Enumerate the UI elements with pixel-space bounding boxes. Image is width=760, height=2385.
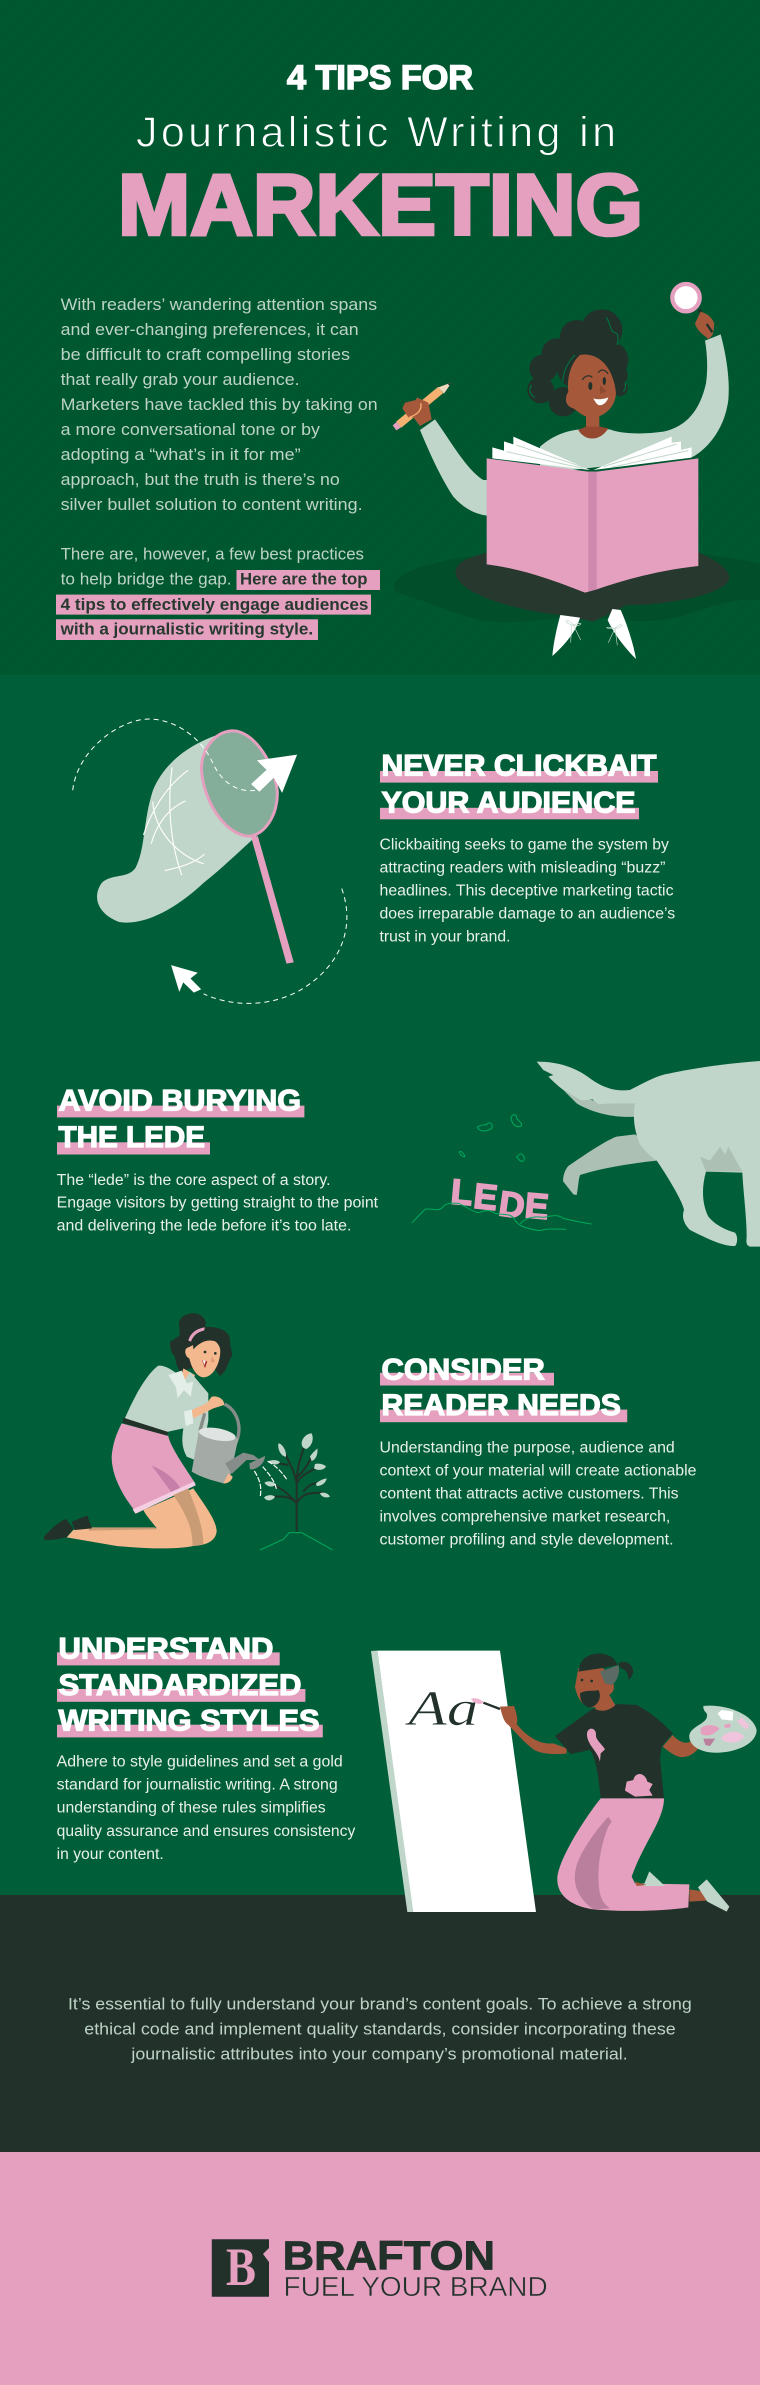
water drops: [254, 1461, 287, 1496]
dirt line and clods: [412, 1115, 592, 1231]
dog belly shading: [700, 1147, 742, 1172]
tip 1 heading: [380, 750, 658, 819]
intro paragraph one: a more conversational tone or by: [61, 421, 321, 439]
logo mark: [212, 2237, 269, 2297]
hair: [527, 309, 628, 416]
illustration: woman watering a plant: [43, 1313, 333, 1550]
tip 4 body: Adhere to style guidelines and set a gold: [57, 1754, 343, 1771]
shoes: [552, 609, 636, 659]
tip 1 heading: NEVER CLICKBAIT: [382, 750, 656, 783]
brush: [471, 1698, 500, 1709]
skirt: [455, 552, 729, 622]
canvas: Aa: [405, 1680, 478, 1736]
tip 2 heading: [57, 1084, 304, 1154]
watering can: [192, 1404, 265, 1483]
tip 3 body: context of your material will create actionable: [380, 1463, 696, 1480]
dashed path upper: [73, 719, 257, 791]
canvas: [371, 1651, 536, 1912]
belt: [123, 1418, 168, 1437]
arm and hand: [184, 1396, 224, 1426]
tip 3 heading: READER NEEDS: [382, 1389, 621, 1422]
hair back: [170, 1313, 232, 1376]
ground and plant: [260, 1433, 333, 1550]
tip 3 body: Understanding the purpose, audience and: [380, 1440, 675, 1457]
sweater: [420, 334, 729, 516]
closing text: journalistic attributes into your company’s promotional material.: [130, 2045, 628, 2063]
dog shaded limbs: [563, 1090, 657, 1195]
closing text: [68, 1995, 692, 2063]
tip 1 body: [380, 836, 676, 945]
neck: [578, 413, 608, 439]
face: [530, 317, 625, 417]
title line: 4 tips for: 4 TIPS FOR: [287, 59, 473, 97]
t-shirt: [555, 1704, 673, 1798]
pencil and hand: [393, 382, 452, 430]
tip 4 heading: STANDARDIZED: [58, 1669, 302, 1702]
buried lede word: LEDE: [449, 1172, 550, 1227]
intro paragraph one: [61, 296, 378, 514]
closing text: It’s essential to fully understand your brand’s content goals. To achieve a strong: [68, 1995, 692, 2013]
legs: [67, 1488, 217, 1548]
intro paragraph two: There are, however, a few best practices: [61, 546, 364, 564]
tip 4 body: understanding of these rules simplifies: [57, 1800, 326, 1816]
logo wordmark: BRAFTON: [283, 2232, 495, 2278]
tip 1 body: does irreparable damage to an audience’s: [380, 905, 676, 922]
tip 3 body: involves comprehensive market research,: [380, 1508, 670, 1526]
arms: [500, 1706, 698, 1757]
title line: marketing: MARKETING: [118, 158, 643, 254]
tip 2 body: and delivering the lede before it’s too late.: [57, 1218, 351, 1235]
intro paragraph one: approach, but the truth is there’s no: [61, 471, 340, 489]
ground shadow: [393, 553, 760, 622]
tip 3 heading: CONSIDER: [382, 1354, 545, 1386]
shirt: [123, 1366, 208, 1460]
dog body and tail: [537, 1061, 760, 1247]
closing text: ethical code and implement quality standards, consider incorporating these: [84, 2020, 676, 2038]
tip 3 body: content that attracts active customers. This: [380, 1486, 679, 1502]
head: [575, 1654, 633, 1708]
intro paragraph one: that really grab your audience.: [61, 371, 300, 389]
illustration: woman reading a pink book: [393, 284, 760, 659]
dashed path lower: [204, 889, 347, 1003]
net handle: [251, 836, 294, 964]
tip 2 heading: THE LEDE: [58, 1121, 205, 1154]
net hoop: [201, 731, 277, 836]
illustration: painter at canvas: [371, 1651, 757, 1912]
intro paragraph two: with a journalistic writing style.: [60, 620, 313, 638]
intro paragraph one: be difficult to craft compelling stories: [61, 346, 350, 364]
shorts: [112, 1423, 196, 1514]
intro paragraph two: to help bridge the gap.: [61, 571, 232, 589]
paint splats on shirt: [587, 1729, 653, 1797]
face: [185, 1327, 222, 1377]
intro text block: [56, 296, 380, 640]
intro paragraph one: Marketers have tackled this by taking on: [61, 396, 378, 414]
tip 3 body: customer profiling and style development.: [380, 1531, 674, 1548]
tip 3 heading: [380, 1354, 627, 1422]
illustration: butterfly net catching a cursor: [73, 719, 347, 1003]
tip 4 heading: [57, 1633, 323, 1738]
title: [118, 59, 643, 254]
tip 4 heading: WRITING STYLES: [58, 1705, 320, 1738]
tip 2 body: The “lede” is the core aspect of a story.: [57, 1172, 331, 1189]
tip 1 heading: YOUR AUDIENCE: [382, 786, 636, 819]
net threads: [143, 767, 205, 875]
pants: [557, 1798, 689, 1911]
open book: [487, 437, 698, 593]
intro paragraph two: 4 tips to effectively engage audiences: [61, 596, 368, 614]
shirt collar: [168, 1371, 193, 1398]
tip 1 body: attracting readers with misleading “buzz”: [380, 860, 666, 876]
intro paragraph one: silver bullet solution to content writing.: [61, 496, 363, 514]
intro paragraph one: and ever-changing preferences, it can: [61, 321, 359, 339]
logo tagline: FUEL YOUR BRAND: [284, 2271, 548, 2302]
tip 2 body: Engage visitors by getting straight to the point: [57, 1195, 379, 1212]
intro paragraph one: With readers’ wandering attention spans: [61, 296, 377, 314]
tip 4 body: quality assurance and ensures consistency: [57, 1823, 356, 1840]
brafton logo: [212, 2232, 548, 2302]
neck: [178, 1368, 195, 1390]
intro paragraph two: [60, 546, 368, 638]
tip 1 body: headlines. This deceptive marketing tactic: [380, 882, 674, 900]
logo mark: B: [226, 2237, 256, 2297]
title line: journalistic writing in: Journalistic Writing in: [136, 109, 616, 157]
magnifying glass and hand: [672, 284, 714, 339]
tip 4 body: [57, 1754, 356, 1863]
tip 2 heading: AVOID BURYING: [58, 1084, 301, 1118]
tip 4 body: standard for journalistic writing. A strong: [57, 1777, 338, 1794]
tip 1 body: trust in your brand.: [380, 928, 510, 945]
illustration: dog digging up the lede: [412, 1061, 760, 1247]
palette: [689, 1706, 757, 1753]
intro paragraph two: Here are the top: [240, 571, 368, 589]
tip 4 heading: UNDERSTAND: [58, 1633, 273, 1666]
shoes and ankles: [635, 1871, 729, 1912]
neck: [595, 1693, 617, 1713]
tip 4 body: in your content.: [57, 1846, 164, 1863]
cursor arrow lower: [171, 965, 201, 993]
tip 3 body: [380, 1440, 696, 1548]
intro paragraph one: adopting a “what’s in it for me”: [61, 446, 301, 464]
tip 2 body: [57, 1172, 379, 1235]
cursor arrow upper: [251, 755, 297, 793]
net bag: [97, 732, 262, 923]
tip 1 body: Clickbaiting seeks to game the system by: [380, 836, 669, 854]
highlight bars: [56, 570, 380, 640]
shoes: [43, 1516, 92, 1540]
